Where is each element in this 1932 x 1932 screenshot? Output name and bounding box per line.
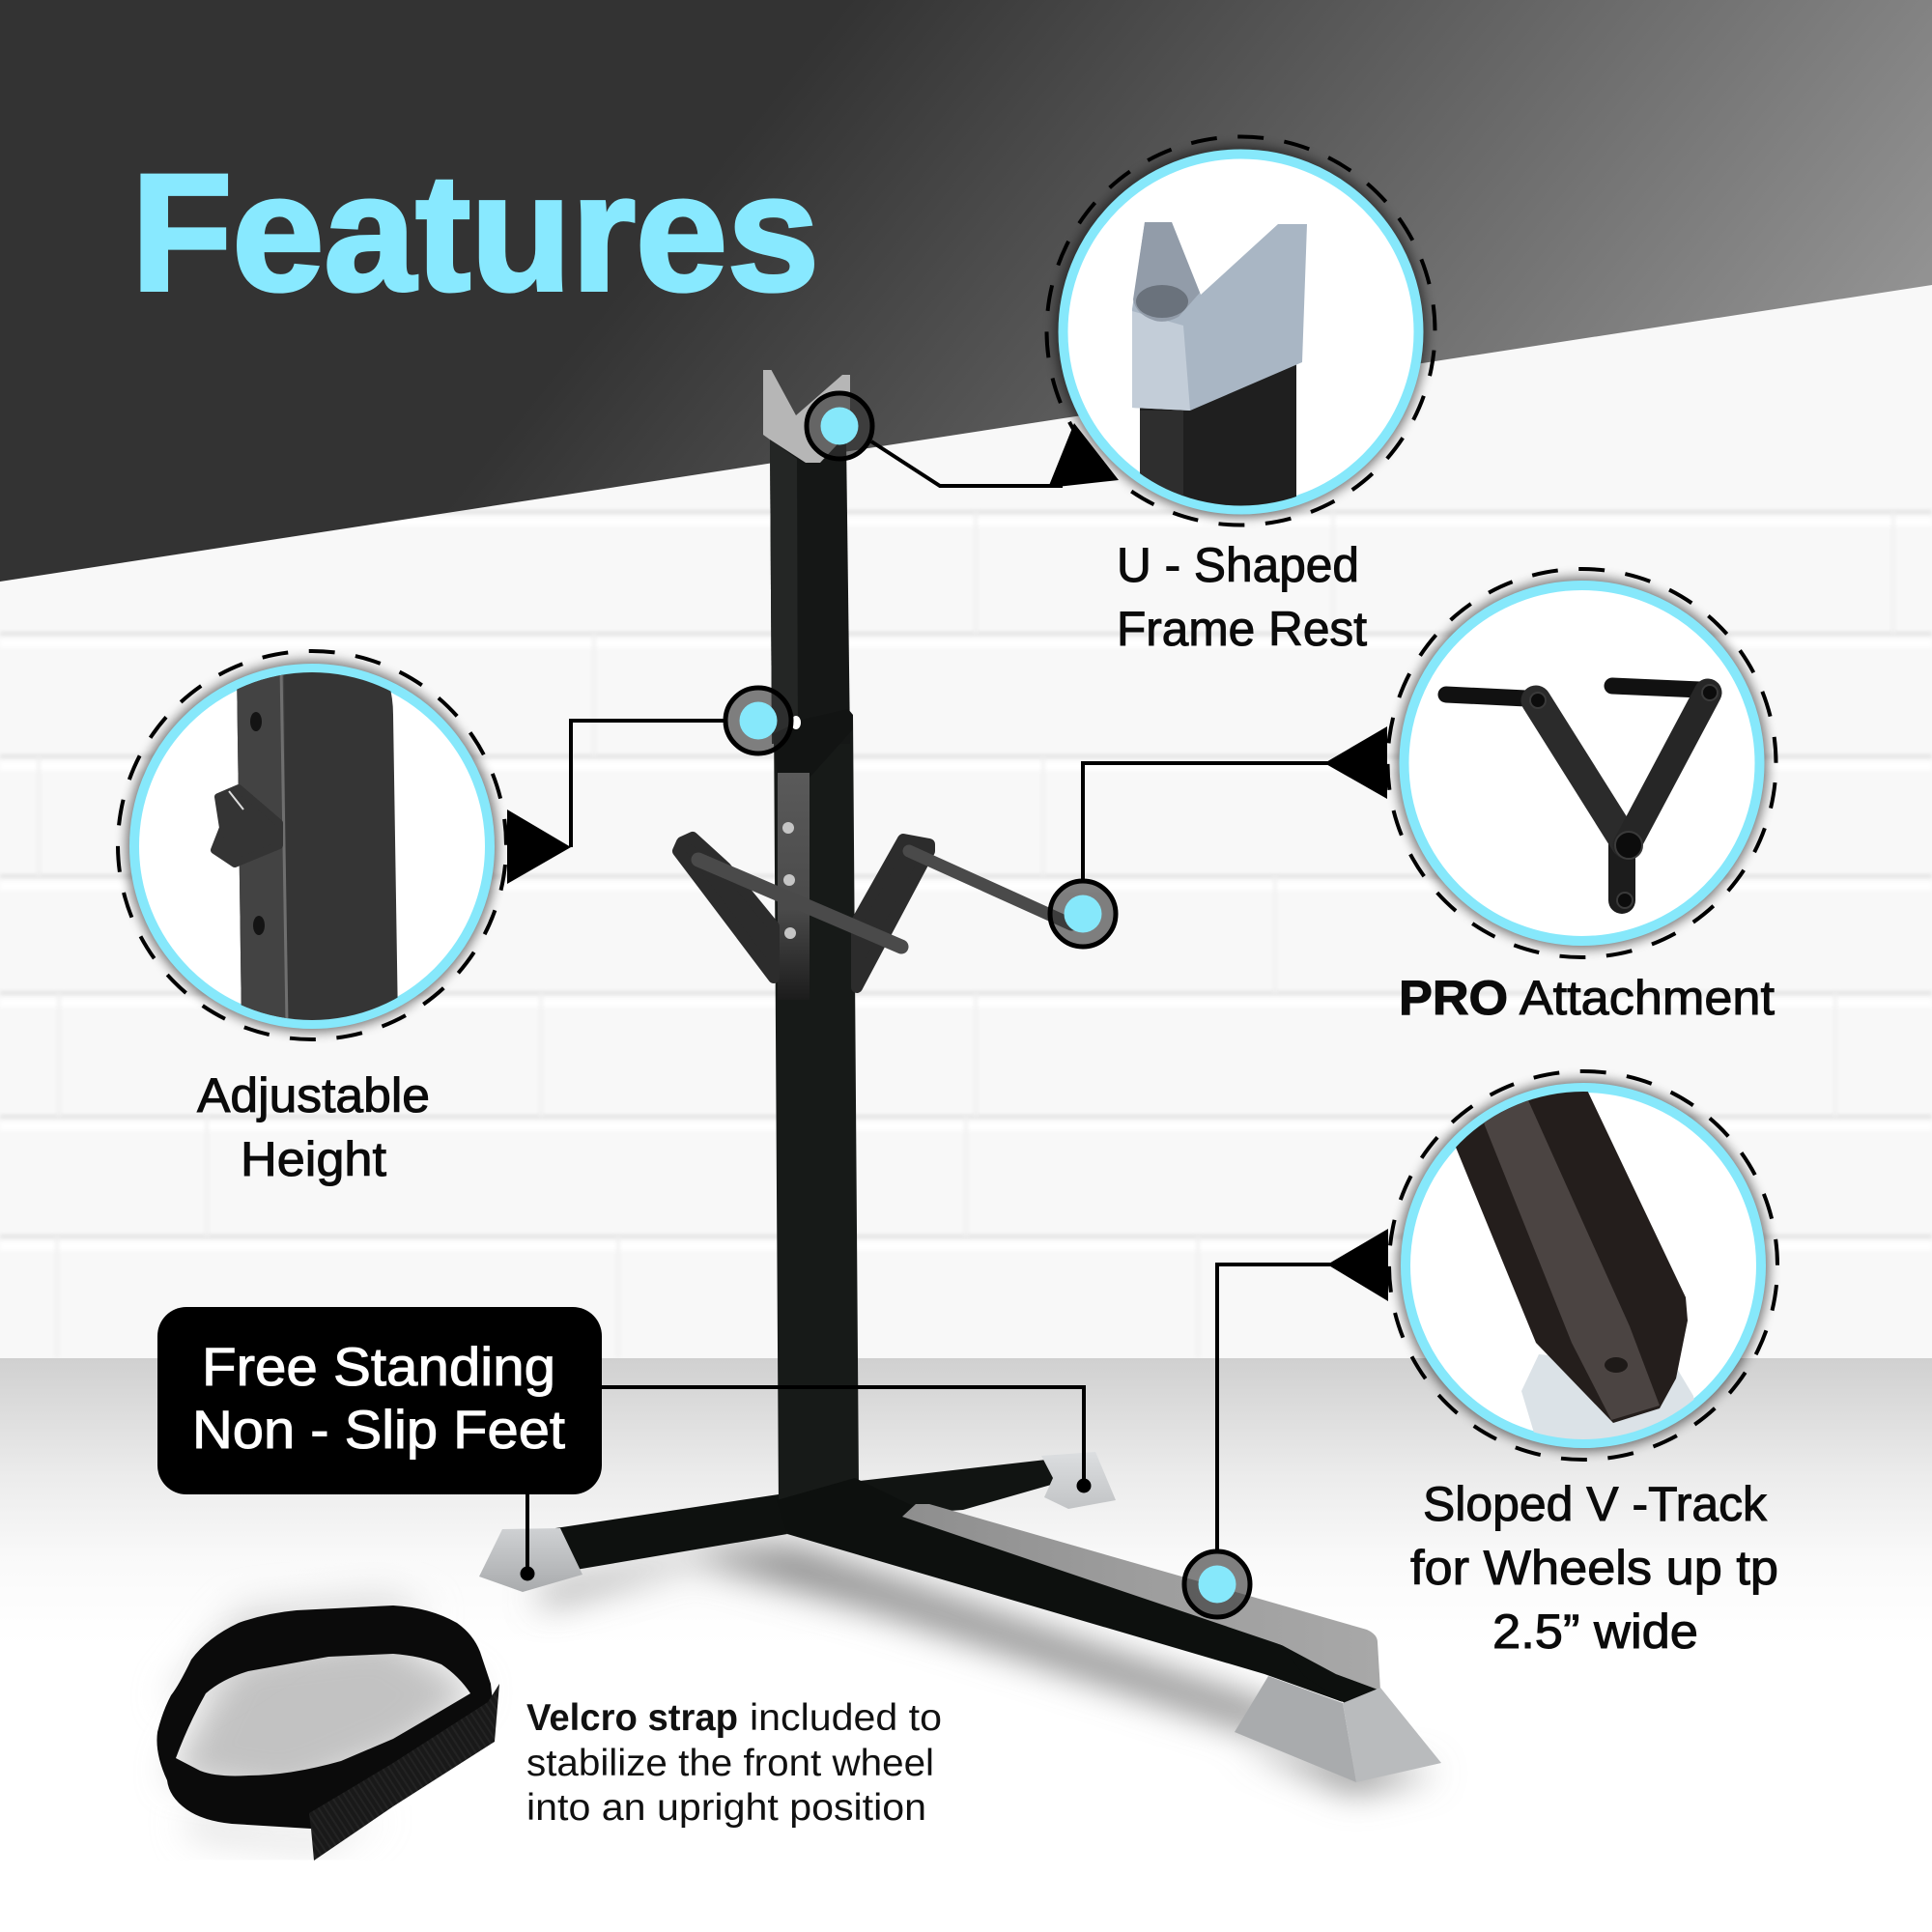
stand: upright post upper [770,440,850,744]
label: PRO attachment: PRO Attachment [1399,971,1775,1025]
label: adjustable height: Height [241,1132,386,1186]
stand: right Y arm [857,839,929,987]
detail circle: sloped V-track [1389,1043,1777,1460]
stand: holes [782,822,796,939]
text: velcro strap note: Velcro strap [526,1697,738,1739]
stand shadows [541,1536,1439,1792]
stand: sloped v track [902,1504,1380,1690]
marker: adjustable height [725,688,791,753]
callout: adjustable height leader [507,721,724,884]
brick wall background [0,0,1932,1362]
stand: left arm [555,1494,787,1570]
text: velcro strap note: into an upright position [526,1787,926,1829]
stand: rear foot [1041,1452,1116,1509]
dark diagonal header background [0,0,1932,582]
label: adjustable height [197,1068,430,1186]
badge: free standing non-slip feet: Free Standing [202,1336,555,1397]
callout: pro attachment leader [1083,726,1387,880]
callout: frame rest leader [871,423,1119,488]
badge: free standing non-slip feet: Non - Slip Feet [192,1399,565,1460]
callout: sloped track leader [1217,1229,1388,1549]
stand: front foot right face [1343,1688,1441,1782]
text: velcro strap note [526,1697,942,1829]
detail circle: U-shaped frame rest [1047,137,1435,526]
text: velcro strap note: stabilize the front wheel [526,1743,934,1784]
stand: white knob [791,716,801,729]
title: Features [131,140,819,326]
stand: track end dark [1282,1645,1380,1705]
callout: free standing leaders [520,1387,1092,1580]
stand: hole strip [778,773,810,1000]
label: sloped V-track: Sloped V -Track [1423,1477,1768,1531]
stand: long base arm black [777,1478,1343,1702]
detail circle: adjustable height [118,651,506,1039]
stand: front foot left face [1235,1676,1356,1782]
velcro strap [156,1594,499,1861]
stand: left Y arm [678,838,774,978]
text: velcro strap note: included to [750,1697,942,1739]
stand: left foot [479,1528,582,1592]
label: adjustable height: Adjustable [197,1068,430,1122]
marker: frame rest [807,393,872,459]
stand: rods [698,860,901,947]
stand: sleeve collar [773,709,853,782]
stand: rear arm [860,1459,1058,1517]
label: sloped V-track: 2.5” wide [1492,1605,1698,1659]
badge: free standing non-slip feet [157,1307,602,1494]
label: U-shaped frame rest [1117,538,1367,656]
label: U-shaped frame rest: Frame Rest [1117,602,1367,656]
label: U-shaped frame rest: U - Shaped [1117,538,1359,592]
floor [0,1358,1932,1932]
label: sloped V-track: for Wheels up tp [1410,1541,1778,1595]
stand: v-shaped rest [763,370,850,463]
marker: pro attachment [1050,881,1116,947]
stand: upright post lower [774,715,868,1546]
marker: sloped track [1184,1551,1250,1617]
detail circle: PRO attachment [1387,569,1776,957]
bike stand [479,370,1441,1782]
label: sloped V-track [1410,1477,1778,1659]
